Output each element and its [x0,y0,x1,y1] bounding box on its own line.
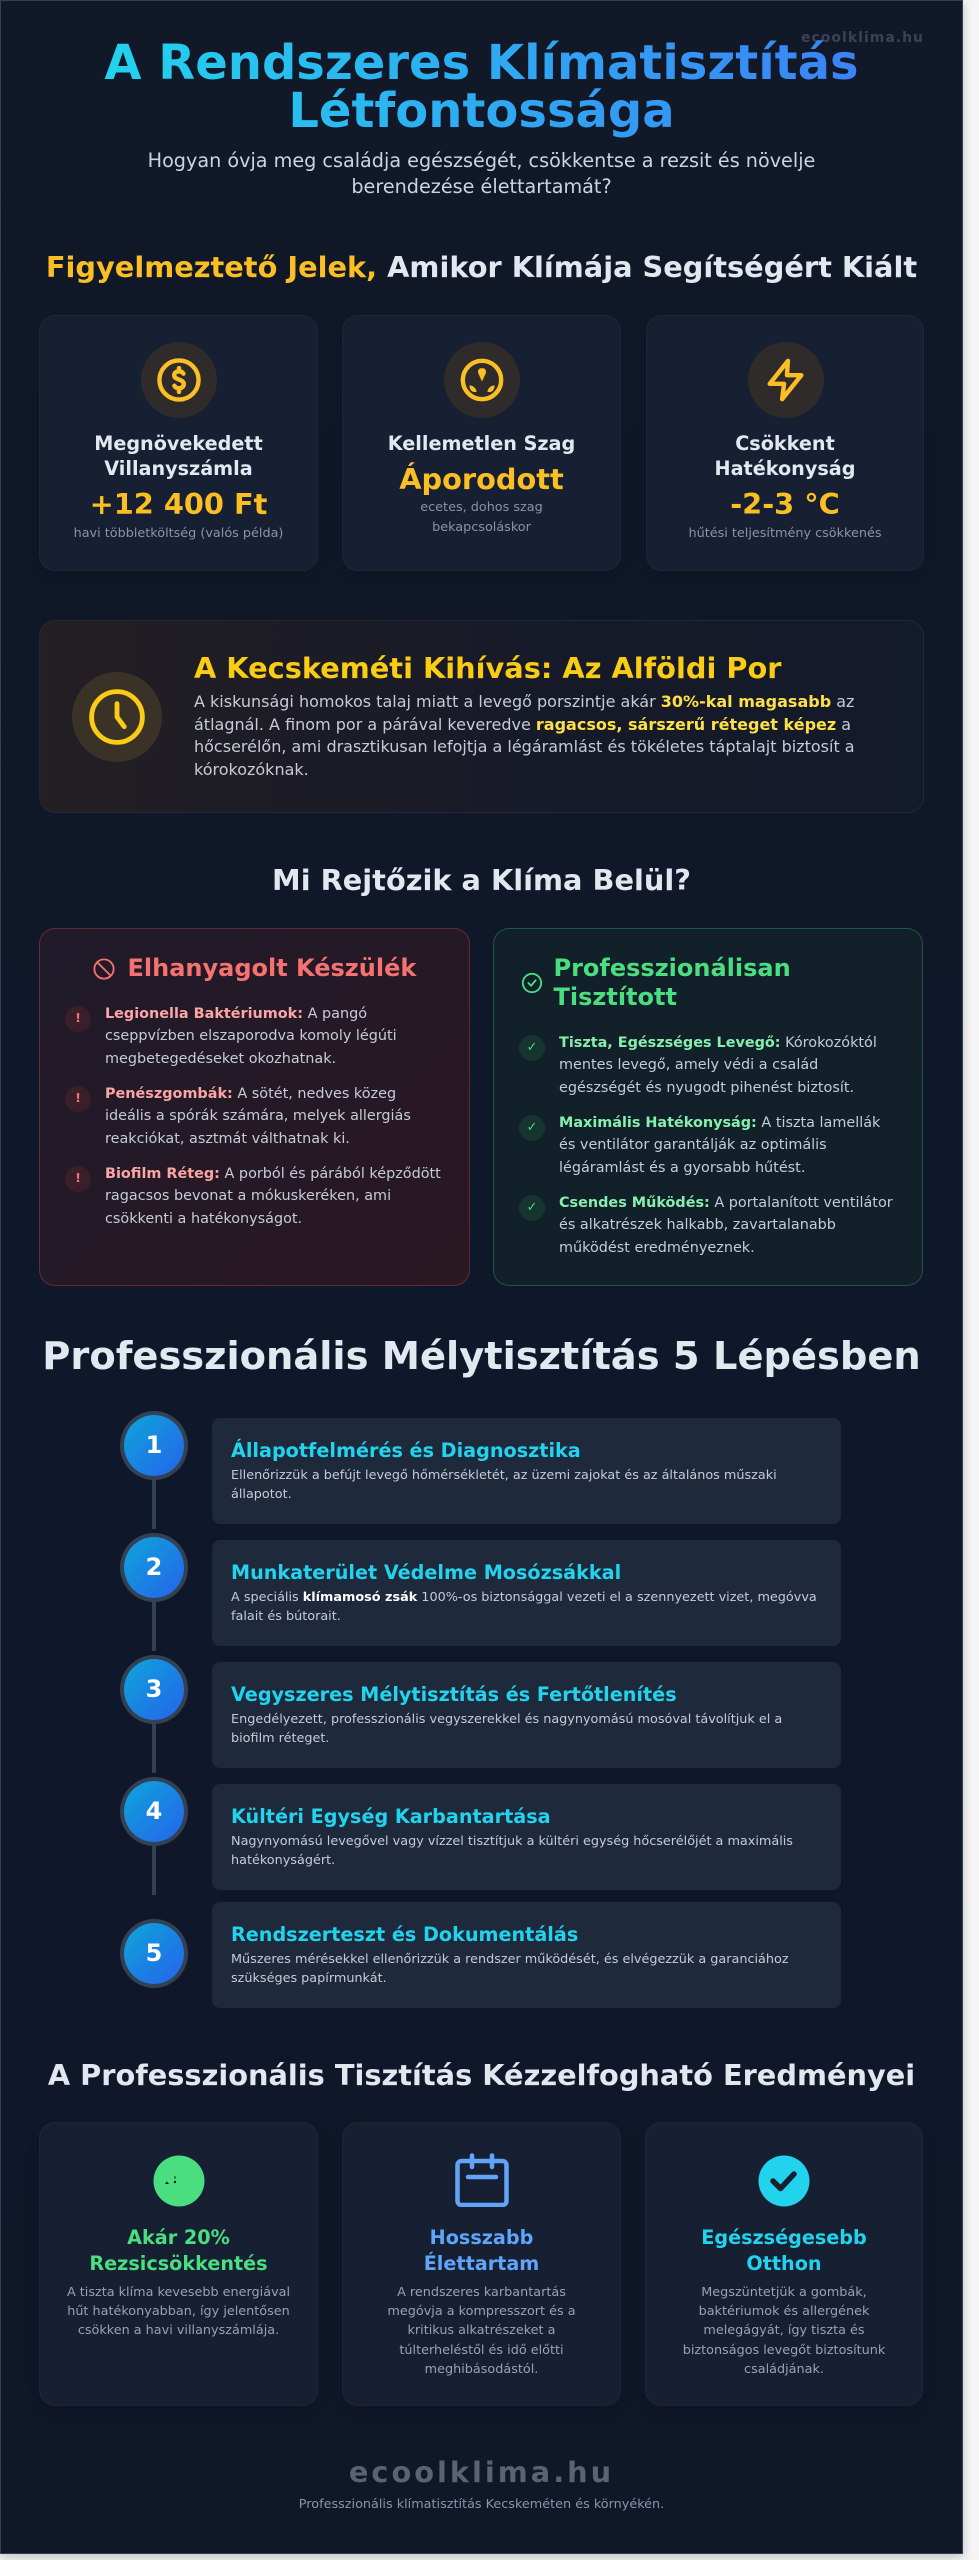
step number: 4 [146,1797,162,1825]
step number [120,1411,188,1480]
title: Létfontossága [288,83,675,139]
heading: warning signs: Figyelmeztető Jelek, Amikor Klímája Segítségért Kiált [46,250,917,284]
step number: 1 [146,1431,162,1459]
step card: Ellenőrizzük a befújt levegő hőmérsékletét, az üzemi zajokat és az általános műszaki [231,1468,777,1483]
step number [120,1777,188,1846]
step card [212,1784,841,1890]
step 2 [120,1533,841,1651]
step card: állapotot. [231,1487,292,1502]
list item: mold: ideális a spórák számára, melyek allergiás [105,1108,411,1124]
callout text: kórokozóknak. [194,760,309,779]
icon: green coin [154,2156,204,2206]
result text: túlterheléstől és idő előtti [399,2343,564,2358]
result text: baktériumok és allergének [699,2304,869,2319]
result text: kritikus alkatrészeket a [408,2323,555,2338]
result title: Élettartam [424,2252,539,2275]
panel: healthier home result [645,2122,923,2406]
footer note: Professzionális klímatisztítás Kecskeméten és környékén. [299,2496,664,2512]
list item: mold: ! [75,1091,81,1106]
panel: electricity bill card [39,315,318,571]
list item: clean air: Tiszta, Egészséges Levegő: Kórokozóktól [559,1035,877,1051]
result text: A rendszeres karbantartás [397,2285,566,2300]
callout text: hőcserélőn, ami drasztikusan lefojtja a légáramlást és tökéletes táptalajt biztosít a [194,737,855,756]
list item: clean air [519,1035,877,1096]
list item: quiet operation [519,1195,893,1256]
step card: falait és bútorait. [231,1609,341,1624]
card title [94,432,263,480]
step card: Állapotfelmérés és Diagnosztika [231,1439,581,1462]
step card: A speciális klímamosó zsák 100%-os biztonsággal vezeti el a szennyezett vizet, megóvva [231,1590,817,1605]
result text: biztonságos levegőt biztosítunk [683,2343,885,2358]
list item: clean air: mentes levegő, amely védi a család [559,1057,818,1073]
step 3 [120,1655,841,1773]
title [104,35,859,139]
result text: csökken a havi villanyszámlája. [78,2323,279,2338]
subtitle [148,149,815,198]
result text: melegágyát, így tiszta és [703,2323,865,2338]
card note: bekapcsoláskor [432,520,531,535]
card title: Csökkent [735,432,835,455]
step 4 [120,1777,841,1895]
card value: +12 400 Ft [90,487,267,521]
result text: A tiszta klíma kevesebb energiával [67,2285,290,2300]
icon: dollar coin [140,342,216,418]
card title: Villanyszámla [104,457,253,480]
list item: biofilm: ragacsos bevonat a mókuskeréken, ami [105,1188,391,1204]
list item: clean air: ✓ [527,1040,537,1055]
step card: Vegyszeres Mélytisztítás és Fertőtlenítés [231,1683,677,1706]
card note [420,500,543,535]
card value: -2-3 °C [730,487,840,521]
result text: Megszüntetjük a gombák, [701,2285,867,2300]
heading: what hides inside: Mi Rejtőzik a Klíma Belül? [272,863,691,897]
callout text [194,692,855,779]
step card: Engedélyezett, professzionális vegyszerekkel és nagynyomású mosóval távolítjuk el a [231,1712,782,1727]
callout heading: A Kecskeméti Kihívás: Az Alföldi Por [194,651,781,685]
step 5 [120,1902,841,2008]
step card: biofilm réteget. [231,1731,329,1746]
step card: Nagynyomású levegővel vagy vízzel tisztítjuk a kültéri egység hőcserélőjét a maximális [231,1834,793,1849]
footer brand: ecoolklima.hu [349,2455,614,2489]
list item: maximum efficiency: és ventilátor garantálják az optimális [559,1137,827,1153]
list item: legionella: ! [75,1011,81,1026]
card note: hűtési teljesítmény csökkenés [688,526,882,541]
step card [212,1902,841,2008]
step card [212,1662,841,1768]
list item: quiet operation: és alkatrészek halkabb, zavartalanabb [559,1217,836,1233]
card note: ecetes, dohos szag [420,500,543,515]
panel heading: Elhanyagolt Készülék [128,954,416,982]
card value: Áporodott [399,462,564,496]
callout text: A kiskunsági homokos talaj miatt a levegő porszintje akár 30%-kal magasabb az [194,692,854,711]
result text [683,2285,886,2377]
list item: legionella: cseppvízben elszaporodva komoly légúti [105,1028,397,1044]
subtitle: Hogyan óvja meg családja egészségét, csökkentse a rezsit és növelje [148,149,815,172]
card title [715,432,855,480]
list item: legionella: Legionella Baktériumok: A pangó [105,1006,367,1022]
result title [701,2226,867,2275]
heading: results: A Professzionális Tisztítás Kézzelfogható Eredményei [48,2058,915,2092]
icon: prohibited [93,958,114,980]
list item: maximum efficiency: légáramlást és a gyorsabb hűtést. [559,1160,805,1176]
icon: calendar [455,2153,509,2207]
panel: savings result [39,2122,318,2406]
list item: mold: reakciókat, asztmát válthatnak ki. [105,1131,350,1147]
card title: Megnövekedett [94,432,263,455]
step number [120,1919,188,1988]
panel: reduced efficiency card [646,315,924,571]
list item: clean air: egészségét és nyugodt pihenést biztosít. [559,1080,854,1096]
result text: családjának. [744,2362,824,2377]
title: A Rendszeres Klímatisztítás [104,35,859,91]
icon: check badge [758,2156,810,2206]
icon: smell [444,342,520,418]
panel: bad smell card [342,315,621,571]
step number: 5 [146,1939,162,1967]
panel: longer lifespan result [342,2122,621,2406]
list item: biofilm: ! [75,1171,81,1186]
panel heading: Tisztított [554,983,677,1011]
step 1 [120,1411,841,1529]
result title: Hosszabb [430,2226,533,2249]
heading: five steps: Professzionális Mélytisztítás 5 Lépésben [42,1334,921,1379]
result text: megóvja a kompresszort és a [387,2304,576,2319]
panel: neglected unit [39,928,470,1286]
list item: legionella: megbetegedéseket okozhatnak. [105,1051,336,1067]
result title [89,2226,268,2275]
result title: Akár 20% [127,2226,230,2249]
step card: Rendszerteszt és Dokumentálás [231,1923,578,1946]
step number: 2 [146,1553,162,1581]
result title: Rezsicsökkentés [89,2252,268,2275]
panel heading [554,954,791,1011]
list item: mold [65,1086,411,1147]
card title: Kellemetlen Szag [388,432,575,455]
step card [212,1540,841,1646]
step number [120,1533,188,1602]
list item: quiet operation: ✓ [527,1200,537,1215]
panel: professionally cleaned unit [493,928,923,1286]
watermark: ecoolklima.hu [801,30,924,46]
step card: Kültéri Egység Karbantartása [231,1805,551,1828]
panel: Kecskemét challenge callout [39,620,924,813]
card title: Hatékonyság [715,457,855,480]
step number: 3 [146,1675,162,1703]
list item: maximum efficiency: Maximális Hatékonyság: A tiszta lamellák [559,1115,880,1131]
icon: lightning bolt [748,342,824,418]
icon: clock [72,672,162,762]
step card: szükséges papírmunkát. [231,1971,387,1986]
result title: Egészségesebb [701,2226,867,2249]
list item: quiet operation: Csendes Működés: A portalanított ventilátor [559,1195,893,1211]
callout text: átlagnál. A finom por a párával keveredve ragacsos, sárszerű réteget képez a [194,715,851,734]
list item: mold: Penészgombák: A sötét, nedves közeg [105,1086,396,1102]
list item: biofilm [65,1166,441,1227]
result title: Otthon [746,2252,822,2275]
result title [424,2226,539,2275]
result text: meghibásodástól. [425,2362,538,2377]
icon: check circle [522,972,542,994]
step number [120,1655,188,1724]
step card: hatékonyságért. [231,1853,335,1868]
step card [212,1418,841,1524]
subtitle: berendezése élettartamát? [351,175,612,198]
step card: Munkaterület Védelme Mosózsákkal [231,1561,621,1584]
list item: maximum efficiency [519,1115,880,1176]
list item: biofilm: Biofilm Réteg: A porból és párából képződött [105,1166,441,1182]
result text [387,2285,576,2377]
result text [67,2285,290,2338]
step card: Műszeres mérésekkel ellenőrizzük a rendszer működését, és elvégezzük a garanciához [231,1952,789,1967]
card note: havi többletköltség (valós példa) [74,526,283,541]
list item: maximum efficiency: ✓ [527,1120,537,1135]
result text: hűt hatékonyabban, így jelentősen [67,2304,290,2319]
panel heading: Professzionálisan [554,954,791,982]
list item: biofilm: csökkenti a hatékonyságot. [105,1211,302,1227]
list item: quiet operation: működést eredményeznek. [559,1240,755,1256]
list item: legionella [65,1006,397,1067]
